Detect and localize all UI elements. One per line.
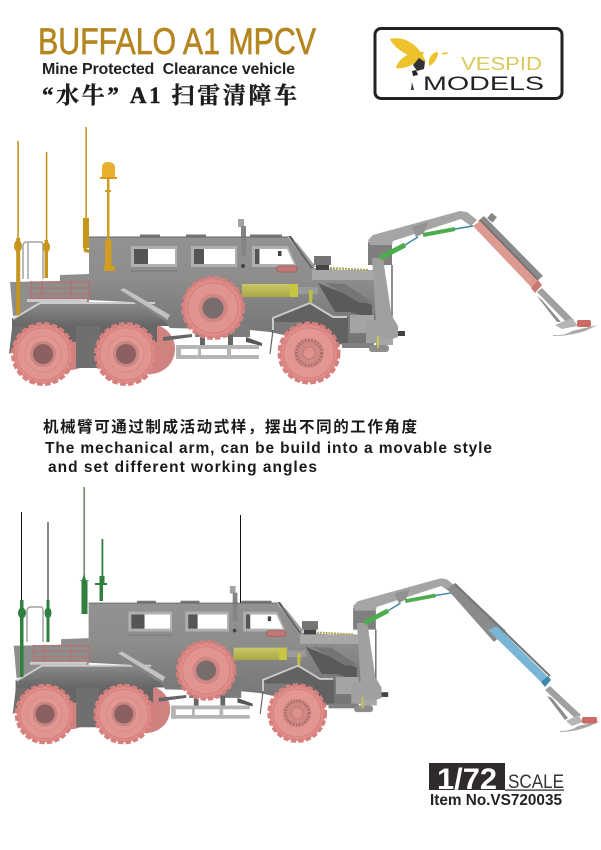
instruction text: Chinese: 机械臂可通过制成活动式样，摆出不同的工作角度: [43, 417, 417, 436]
lower arm bottom: extended with blue cylinder: [447, 583, 600, 732]
logo word: VESPID: VESPID: [461, 54, 542, 74]
vehicle top: gold antennas: [14, 127, 117, 315]
chinese title: “水牛” A1 扫雷清障车: [42, 83, 297, 108]
title: Buffalo A1 MPCV: BUFFALO A1 MPCV: [38, 21, 316, 62]
lower arm top: extended with pink cylinder: [473, 213, 598, 336]
scale word: SCALE: [508, 772, 564, 793]
vehicle top: grab rail: [23, 242, 43, 279]
item number: Item No.VS720035: [430, 792, 562, 809]
scale number: 1/72: [437, 763, 497, 796]
vehicle bottom: grab rail: [27, 607, 43, 642]
icon: wasp body: [411, 58, 425, 90]
instruction text: English line 2: and set different working angles: [48, 459, 317, 476]
logo: Vespid Models: [375, 28, 562, 98]
instruction text: English line 1: The mechanical arm, can be build into a movable style: [45, 440, 492, 457]
vehicle bottom: Buffalo side view with arm: [13, 578, 456, 742]
subtitle: Mine Protected Clearance vehicle: Mine Protected Clearance vehicle: [42, 61, 295, 78]
scale badge: [429, 763, 564, 796]
logo word: MODELS: MODELS: [423, 74, 544, 95]
vehicle top: Buffalo side view with arm: [9, 211, 477, 384]
vehicle bottom: green antennas: [18, 487, 241, 677]
icon: wasp wings: [390, 38, 449, 68]
